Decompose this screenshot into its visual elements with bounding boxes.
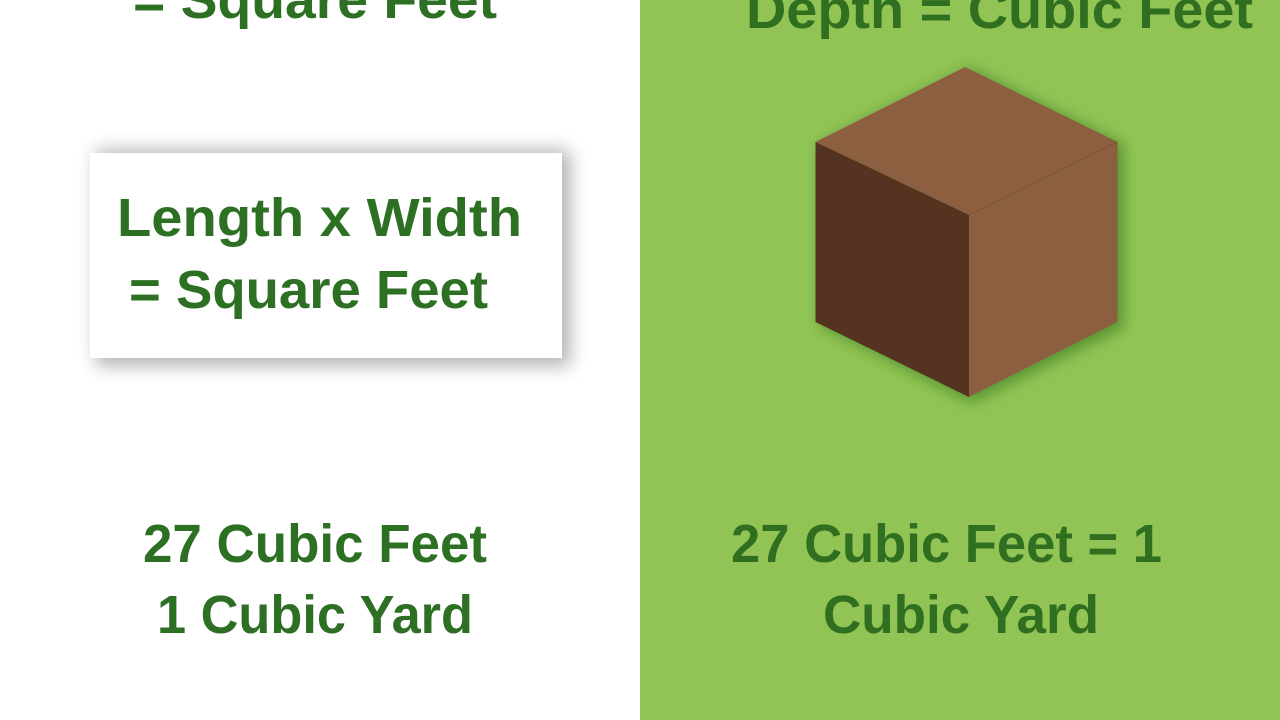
text: cubic feet to cubic yard, right: Cubic Yard (823, 585, 1099, 645)
panel: square feet (left) (0, 0, 640, 720)
text: cubic feet to cubic yard, left: 1 Cubic Yard (157, 585, 473, 645)
panel: cubic feet (right) (640, 0, 1280, 720)
callout: length x width formula (90, 150, 570, 366)
text: cubic feet to cubic yard, left (143, 514, 487, 645)
callout: length x width formula: Length x Width (117, 188, 522, 248)
text: cubic feet to cubic yard, left: 27 Cubic Feet (143, 514, 487, 574)
callout: length x width formula: = Square Feet (129, 260, 488, 320)
icon: brown soil cube (816, 67, 1124, 403)
text: cubic feet to cubic yard, right (731, 514, 1162, 645)
text: cubic feet to cubic yard, right: 27 Cubic Feet = 1 (731, 514, 1162, 574)
